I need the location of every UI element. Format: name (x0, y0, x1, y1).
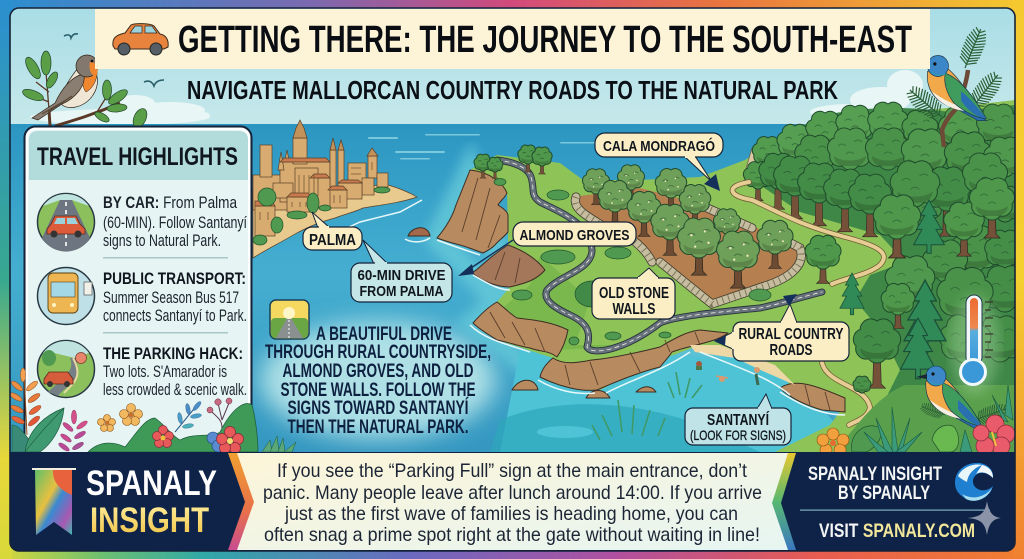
callout: Santanyí: (LOOK FOR SIGNS) (690, 427, 786, 443)
callout: rural country roads: RURAL COUNTRY (738, 326, 844, 343)
text block: beautiful drive: STONE WALLS. FOLLOW THE (280, 379, 476, 401)
panel header (29, 131, 248, 180)
green foliage base (88, 404, 258, 452)
land (470, 100, 1015, 452)
highlight: by car: (60-MIN). Follow Santanyí (103, 213, 247, 232)
cliff creases (462, 178, 830, 410)
country road (497, 160, 822, 351)
highlight: by car (38, 193, 247, 252)
text block: beautiful drive: THEN THE NATURAL PARK. (288, 416, 468, 438)
text glow (260, 322, 496, 438)
highlight: public transport (38, 268, 247, 325)
insight text: often snag a prime spot right at the gate without waiting in line! (264, 524, 760, 546)
sea (10, 124, 840, 452)
icon: pine branch with blue bird (903, 25, 1006, 147)
highlight: public transport: Summer Season Bus 517 (103, 288, 239, 307)
callout: Palma: PALMA (309, 232, 356, 249)
icon: thermometer (951, 295, 999, 395)
text block: beautiful drive: A BEAUTIFUL DRIVE (316, 323, 452, 345)
callout: almond groves (513, 222, 636, 246)
cliffs (408, 170, 845, 412)
bay (500, 350, 860, 452)
icon: sparkle (967, 501, 1001, 535)
right foreground ground (835, 385, 1015, 452)
callout: almond groves: ALMOND GROVES (520, 227, 630, 244)
brand block (800, 463, 1001, 542)
spiky plant (262, 436, 296, 452)
insight text: just as the first wave of families is heading home, you can (284, 503, 738, 525)
berries (212, 403, 229, 428)
callout: Cala Mondragó: CALA MONDRAGÓ (603, 137, 715, 155)
icon: orange car (113, 24, 168, 55)
callout: old stone walls (592, 268, 675, 319)
icon: wave (955, 463, 993, 501)
forest background (763, 105, 1014, 395)
insight panel (228, 453, 796, 550)
callout: Santanyí (685, 394, 791, 445)
text block: beautiful drive: SIGNS TOWARD SANTANYÍ (288, 396, 469, 419)
big leaves (25, 408, 64, 452)
orange fern (9, 368, 42, 435)
logo: Spanaly Insight: SPANALY (86, 464, 217, 503)
insight text: panic. Many people leave after lunch around 14:00. If you arrive (263, 482, 762, 504)
callout: rural country roads (714, 294, 849, 361)
highlight: by car: BY CAR: From Palma (103, 193, 237, 212)
surf lines (330, 200, 845, 415)
sky (10, 8, 1015, 125)
highlight: parking hack: less crowded & scenic walk. (103, 380, 247, 399)
highlight: public transport: PUBLIC TRANSPORT: (103, 269, 246, 288)
highlight: public transport: connects Santanyí to Park. (103, 306, 247, 325)
callout: Cala Mondragó (595, 133, 723, 191)
callout: 60-min drive: 60-MIN DRIVE (358, 267, 446, 284)
highlight: by car: signs to Natural Park. (103, 231, 221, 250)
bushes (494, 178, 771, 345)
logo: Spanaly Insight: INSIGHT (90, 501, 209, 540)
forest front trees (743, 153, 1015, 258)
callout: rural country roads: ROADS (770, 342, 813, 359)
brand block: BY SPANALY (838, 483, 930, 504)
text block: beautiful drive: ALMOND GROVES, AND OLD (282, 360, 474, 382)
insight text: If you see the “Parking Full” sign at the main entrance, don’t (277, 460, 748, 482)
logo: Spanaly Insight (32, 468, 216, 535)
illustrated scene (10, 8, 1024, 456)
icon: robin on branch (21, 51, 150, 130)
panel header: TRAVEL HIGHLIGHTS (37, 143, 238, 171)
tan walking paths (732, 182, 884, 425)
insight text (263, 460, 762, 546)
text block: beautiful drive (265, 323, 491, 438)
callout: old stone walls: OLD STONE (599, 285, 669, 302)
subtitle: NAVIGATE MALLORCAN COUNTRY ROADS TO THE NATURAL PARK (187, 75, 838, 105)
highlight: parking hack: Two lots. S'Amarador is (103, 362, 227, 381)
stone wall orchard (572, 188, 803, 304)
forest back canopy (752, 102, 1024, 363)
clouds (30, 70, 923, 125)
blue fern (175, 400, 202, 432)
callout: 60-min drive: FROM PALMA (360, 283, 444, 300)
highlight: parking hack: THE PARKING HACK: (103, 344, 243, 363)
almond trees (474, 145, 841, 288)
icon: sunlit road (270, 300, 309, 339)
flowers (207, 432, 224, 452)
lower forest trees (840, 273, 946, 393)
right foreground plants and flowers (817, 366, 1015, 456)
swimmers and seagrass (592, 361, 760, 440)
text block: beautiful drive: THROUGH RURAL COUNTRYSIDE, (265, 341, 491, 363)
brand block: SPANALY INSIGHT (808, 464, 942, 485)
pink fern (57, 410, 89, 453)
Palma city (253, 120, 417, 258)
title banner (95, 9, 930, 69)
shallow water halo (437, 170, 860, 452)
sea highlights (368, 134, 595, 160)
callout: old stone walls: WALLS (612, 301, 656, 318)
panel: travel highlights (24, 126, 252, 466)
panel foliage and flowers (9, 368, 296, 454)
footer bar (10, 452, 1015, 551)
distant headland (746, 148, 756, 169)
highlight: parking hack (38, 340, 247, 399)
callout: Santanyí: SANTANYÍ (707, 410, 769, 429)
callout: 60-min drive (351, 240, 452, 302)
icon: small birds (64, 34, 164, 86)
callout: Palma (303, 212, 362, 250)
brand block: VISIT SPANALY.COM (819, 521, 975, 542)
beach (690, 345, 795, 385)
arrow to coast road (458, 240, 513, 276)
orange flowers (98, 404, 142, 432)
